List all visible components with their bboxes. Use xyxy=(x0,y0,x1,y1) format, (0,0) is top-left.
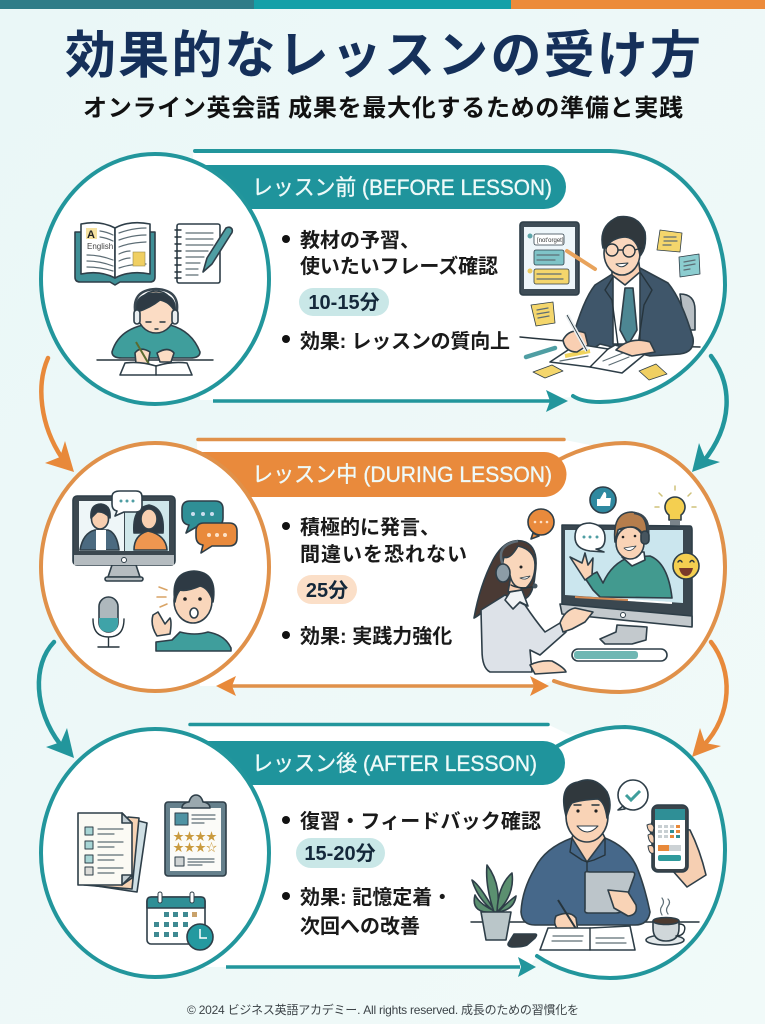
man xyxy=(521,780,650,932)
glasses xyxy=(606,244,641,257)
bullet point 2: 次回への改善 xyxy=(300,915,420,938)
panel background xyxy=(193,151,725,402)
text block xyxy=(282,810,541,938)
open book xyxy=(550,344,645,373)
panel: during lesson xyxy=(41,440,725,696)
time pill xyxy=(296,838,385,868)
icon: thumbs up xyxy=(590,487,616,513)
bullet point 1 xyxy=(282,229,498,278)
panel: before lesson xyxy=(41,151,725,412)
time pill xyxy=(297,575,357,604)
footer: © 2024 ビジネス英語アカデミー. All rights reserved. 成長のための習慣化を xyxy=(187,1002,579,1017)
heading pill xyxy=(200,165,566,209)
icon: light bulb xyxy=(655,486,696,525)
right hand xyxy=(616,340,655,356)
desk stickies xyxy=(533,365,563,378)
hand holding smartphone xyxy=(647,805,706,887)
bullet point 2 xyxy=(282,886,452,938)
title: 効果的なレッスンの受け方 xyxy=(65,27,701,84)
bullet point 1: 使いたいフレーズ確認 xyxy=(300,254,498,278)
tutor woman with headset xyxy=(474,541,593,674)
sticky notes xyxy=(531,230,700,326)
icon: open book xyxy=(75,223,155,285)
icon: orange bubble xyxy=(528,509,554,539)
speech bubble xyxy=(575,523,605,552)
arrow: before to during, left xyxy=(41,358,74,472)
heading pill xyxy=(200,741,565,785)
coffee cup xyxy=(646,898,685,945)
bullet point 2: 効果: 記憶定着・ xyxy=(300,886,452,909)
icon: video call monitor xyxy=(73,491,175,581)
time pill: 10-15分 xyxy=(308,291,380,314)
text block xyxy=(282,229,510,353)
heading pill: レッスン前 (BEFORE LESSON) xyxy=(252,175,552,200)
two-way arrow xyxy=(216,676,549,696)
stylus pen xyxy=(567,251,595,269)
arrow: during to after, left xyxy=(39,642,74,758)
bullet point 1: 復習・フィードバック確認 xyxy=(300,810,541,833)
outline arc xyxy=(195,151,725,402)
panel background xyxy=(197,440,725,692)
panel: after lesson xyxy=(41,724,725,978)
bottom arrow xyxy=(226,957,536,977)
text block xyxy=(282,516,467,648)
speech check bubble xyxy=(618,780,648,810)
tablet xyxy=(520,222,579,295)
plant xyxy=(472,865,516,940)
arrow: before to during, right xyxy=(692,356,727,472)
icon: speech bubbles xyxy=(182,501,237,553)
left circle xyxy=(41,443,269,691)
writing hand xyxy=(563,331,588,352)
bullet point 2: 効果: レッスンの質向上 xyxy=(300,330,510,353)
icon: open book: English xyxy=(87,242,113,251)
icon: feedback clipboard: ★★★★ xyxy=(173,831,217,843)
left circle xyxy=(41,729,269,977)
bullet point 1 xyxy=(282,516,467,566)
smartphone on desk xyxy=(508,934,536,947)
bullet point 1: 教材の予習、 xyxy=(300,229,420,252)
icon: smile emoji xyxy=(673,553,699,579)
icon: speaking person xyxy=(152,571,231,651)
arrow: during to after, right xyxy=(692,642,727,757)
icon: notebook and pen xyxy=(175,224,232,283)
top rule xyxy=(190,723,548,726)
head xyxy=(612,255,640,285)
icon: open book: A xyxy=(87,229,95,241)
marker xyxy=(526,348,555,357)
left circle xyxy=(41,154,269,404)
video progress bar xyxy=(575,597,628,600)
illustration: man reviewing with tablet xyxy=(471,780,706,950)
illustration: online lesson with tutor xyxy=(474,486,699,674)
outline arc xyxy=(548,443,725,692)
icon: checklist documents xyxy=(78,813,147,892)
heading pill xyxy=(200,452,566,497)
tutor on screen xyxy=(570,512,672,598)
desk line xyxy=(520,337,700,347)
icon: feedback clipboard xyxy=(165,795,226,876)
bottom arrow xyxy=(213,390,568,412)
top colour bar xyxy=(0,0,765,9)
panel background xyxy=(190,725,725,978)
icon: microphone xyxy=(93,597,124,647)
icon: feedback clipboard: ★★★☆ xyxy=(173,841,217,854)
tablet: [not'orget] xyxy=(537,238,564,244)
monitor xyxy=(560,525,692,644)
time pill xyxy=(299,288,389,316)
heading pill: レッスン後 (AFTER LESSON) xyxy=(252,751,537,776)
icon: calendar with clock xyxy=(147,892,213,950)
top rule xyxy=(198,438,564,441)
bullet point 1: 間違いを恐れない xyxy=(300,543,467,566)
bullet point 2: 効果: 実践力強化 xyxy=(300,625,452,648)
time pill: 15-20分 xyxy=(304,842,376,865)
desk line xyxy=(471,921,699,923)
icon: student with headphones xyxy=(97,289,213,375)
outline arc xyxy=(537,727,725,978)
progress bar xyxy=(572,649,667,661)
suit xyxy=(572,268,693,356)
chair xyxy=(680,294,695,330)
heading pill: レッスン中 (DURING LESSON) xyxy=(252,462,552,487)
bullet point 1: 積極的に発言、 xyxy=(300,516,440,539)
open notebook xyxy=(540,926,635,950)
time pill: 25分 xyxy=(306,579,348,602)
hair xyxy=(602,217,645,256)
illustration: businessman at desk xyxy=(520,217,700,380)
subtitle: オンライン英会話 成果を最大化するための準備と実践 xyxy=(83,95,683,122)
